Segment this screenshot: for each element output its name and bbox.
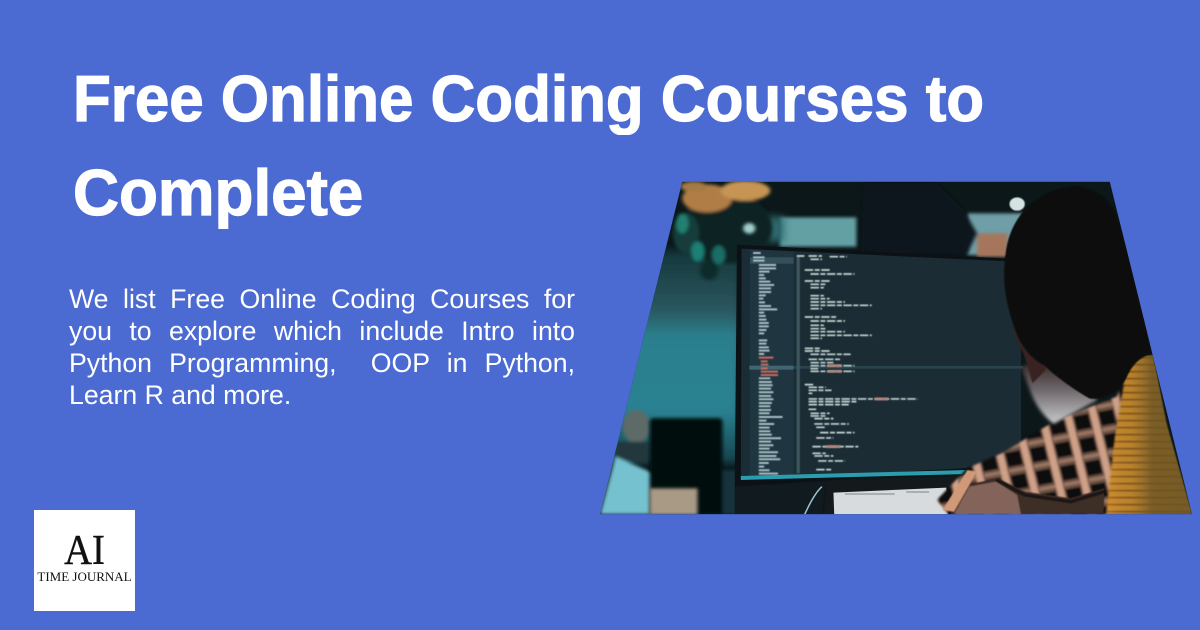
dark figure [860,183,977,253]
description text block: Python Programming, OOP in Python, [69,348,575,378]
description text block: you to explore which include Intro into [69,316,575,346]
monitor stand and cable [734,486,822,514]
monitor [735,245,1023,487]
line numbers [797,257,800,473]
dark chair at left [650,418,722,514]
logo wordmark: TIME JOURNAL [37,569,132,584]
hood [943,470,1104,514]
rear window [780,217,856,247]
selected code tokens [826,366,888,447]
laptop [824,476,967,514]
person at left [600,408,652,514]
teal wall [612,247,737,467]
ear [1013,327,1046,383]
shirt [937,370,1126,514]
orange chair [1103,355,1192,514]
table [650,488,698,515]
lights [1009,197,1025,211]
code lines [797,256,918,470]
title [73,62,984,229]
foliage [673,181,772,280]
neck [1021,360,1098,424]
head [1004,187,1151,399]
description text block: We list Free Online Coding Courses for [69,284,575,314]
file tree [753,253,783,474]
logo mark: AI: AI [64,528,105,574]
title: Free Online Coding Courses to [73,62,984,135]
description text block [69,284,575,410]
photo: developer at a code monitor [600,182,1192,514]
title: Complete [73,156,363,229]
description text block: Learn R and more. [69,380,291,410]
highlighted files [759,358,778,375]
background [600,182,1197,515]
logo: AI Time Journal [34,510,135,611]
